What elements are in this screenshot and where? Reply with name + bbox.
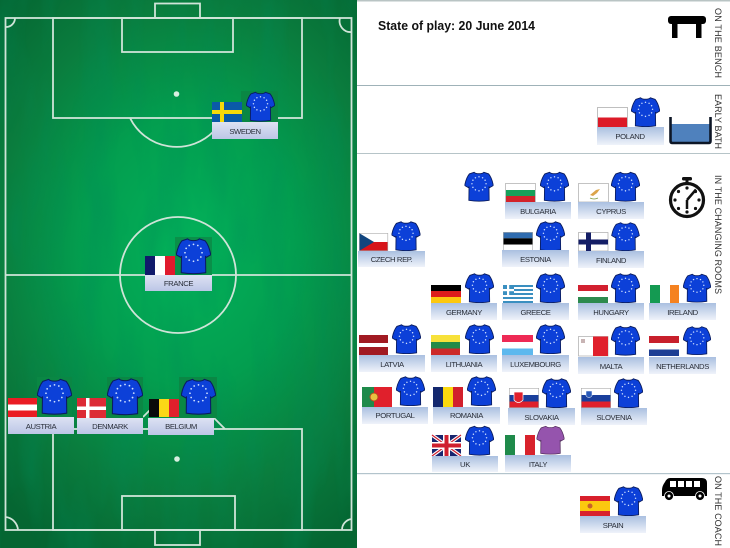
card: Slovakia: SLOVAKIA	[524, 413, 560, 422]
card: Spain: SPAIN	[603, 521, 623, 530]
card: Hungary: HUNGARY	[593, 308, 629, 317]
card: Finland	[578, 223, 644, 268]
card: Netherlands: NETHERLANDS	[656, 362, 709, 371]
card: Ireland	[649, 274, 716, 320]
card: Malta	[578, 326, 644, 374]
card: Denmark	[77, 377, 143, 434]
section label: in the changing rooms: IN THE CHANGING ROOMS	[713, 175, 723, 294]
card: UK: UK	[460, 460, 471, 469]
section label: early bath: EARLY BATH	[713, 94, 723, 149]
icon: coach	[662, 478, 707, 500]
card: Sweden	[212, 91, 278, 139]
card: Netherlands	[649, 327, 716, 374]
card: Slovenia: SLOVENIA	[596, 413, 633, 422]
card: Bulgaria: BULGARIA	[520, 207, 557, 216]
panel dividers	[357, 0, 730, 474]
card: Austria: AUSTRIA	[26, 422, 58, 431]
icon: bath	[670, 117, 711, 143]
card: Greece: GREECE	[520, 308, 551, 317]
card: Finland: FINLAND	[596, 256, 627, 265]
card: Italy	[505, 426, 571, 472]
card: Luxembourg	[502, 325, 569, 372]
section label: on the coach: ON THE COACH	[713, 476, 723, 546]
card: Czech Republic	[358, 222, 425, 267]
card: Estonia: ESTONIA	[520, 255, 552, 264]
card: Bulgaria	[505, 172, 571, 219]
card: Latvia: LATVIA	[380, 360, 405, 369]
card: Portugal: PORTUGAL	[376, 411, 416, 420]
card: Romania: ROMANIA	[450, 411, 484, 420]
card: Italy: ITALY	[529, 460, 547, 469]
card: Poland: POLAND	[615, 132, 645, 141]
card: Hungary	[578, 274, 644, 320]
card: Lithuania: LITHUANIA	[446, 360, 484, 369]
card: Spain	[580, 487, 646, 533]
card: Portugal	[362, 377, 428, 424]
card: Greece	[502, 274, 569, 320]
card: Belgium	[148, 377, 217, 435]
card: Czech Republic: CZECH REP.	[371, 255, 413, 264]
card: Lithuania	[431, 325, 497, 372]
card: Luxembourg: LUXEMBOURG	[510, 360, 561, 369]
card: Ireland: IRELAND	[667, 308, 699, 317]
card: Austria	[8, 377, 74, 434]
card: Estonia	[502, 222, 569, 267]
card: Slovakia	[508, 379, 575, 425]
card: Slovenia	[581, 379, 647, 425]
card: Germany: GERMANY	[446, 308, 482, 317]
card: Germany	[431, 274, 497, 320]
card: Denmark: DENMARK	[92, 422, 129, 431]
icon: stopwatch	[670, 177, 704, 216]
card: Belgium: BELGIUM	[165, 422, 197, 431]
card: Cyprus	[578, 172, 644, 219]
card: France: FRANCE	[164, 279, 193, 288]
title: State of play: 20 June 2014	[378, 19, 535, 33]
panel: football pitch	[0, 0, 357, 548]
card: Sweden: SWEDEN	[229, 127, 261, 136]
card: Poland	[597, 98, 664, 145]
card: France	[145, 237, 212, 291]
card: Latvia	[359, 325, 425, 372]
section label: on the bench: ON THE BENCH	[713, 8, 723, 78]
card: Romania	[433, 377, 500, 424]
card: Cyprus: CYPRUS	[596, 207, 626, 216]
icon: bench	[668, 16, 706, 38]
card: Malta: MALTA	[600, 362, 624, 371]
shirt without a flag	[465, 172, 493, 201]
card: UK	[432, 426, 498, 472]
